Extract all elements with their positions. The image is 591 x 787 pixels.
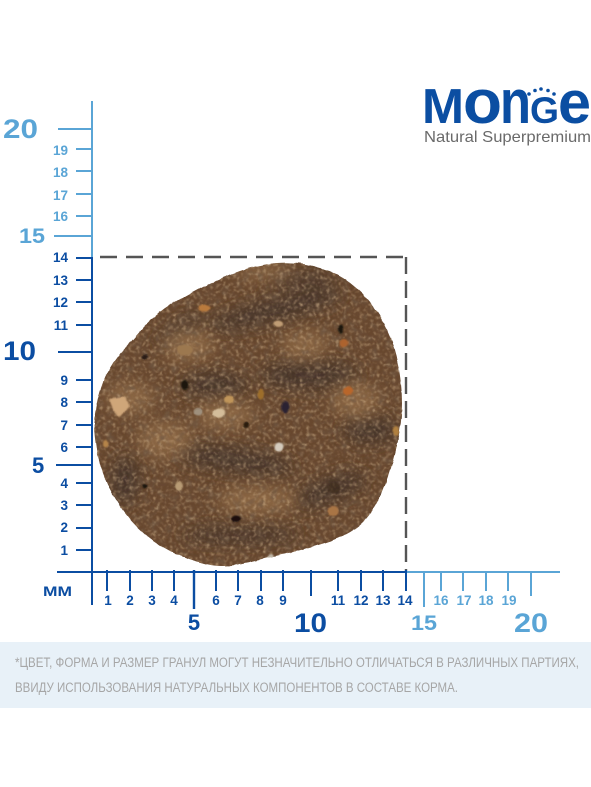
horizontal labels light: 17 — [456, 593, 472, 608]
horizontal labels light: 15 — [411, 612, 437, 635]
vertical labels dark: 7 — [60, 418, 68, 433]
horizontal labels dark: 5 — [188, 610, 200, 635]
horizontal labels light: 16 — [433, 593, 449, 608]
vertical labels light: 15 — [19, 225, 45, 248]
horizontal labels dark: 9 — [279, 593, 287, 608]
horizontal labels dark: 1 — [104, 593, 112, 608]
horizontal labels dark: 12 — [353, 593, 369, 608]
vertical axis light section — [91, 101, 93, 258]
horizontal labels dark: 4 — [170, 593, 178, 608]
kibble dark grain texture — [94, 262, 402, 564]
horizontal axis dark section — [57, 571, 406, 573]
kibble crumbs and holes — [104, 304, 400, 560]
vertical labels dark — [3, 250, 68, 558]
kibble light grain texture — [85, 255, 410, 575]
horizontal ticks dark — [107, 570, 406, 596]
horizontal labels dark: 2 — [126, 593, 134, 608]
vertical labels dark: 14 — [53, 250, 68, 265]
horizontal labels light: 19 — [501, 593, 517, 608]
horizontal tick five — [193, 570, 195, 609]
disclaimer background — [0, 642, 591, 708]
logo crown of stars — [527, 87, 556, 96]
vertical ruler — [3, 101, 93, 605]
disclaimer text line two: ВВИДУ ИСПОЛЬЗОВАНИЯ НАТУРАЛЬНЫХ КОМПОНЕНТОВ В СОСТАВЕ КОРМА. — [15, 680, 458, 695]
horizontal labels dark: 13 — [375, 593, 391, 608]
logo wordmark: o — [463, 68, 502, 137]
vertical axis dark section — [91, 258, 93, 605]
horizontal ruler — [57, 570, 560, 638]
logo: Monge Natural Superpremium — [422, 68, 591, 146]
horizontal labels dark: 3 — [148, 593, 156, 608]
kibble photo — [85, 255, 410, 575]
vertical labels dark: 4 — [60, 476, 68, 491]
horizontal labels dark: 10 — [294, 608, 327, 638]
disclaimer panel — [0, 642, 591, 708]
vertical labels light: 16 — [53, 209, 68, 224]
vertical labels dark: 13 — [53, 273, 68, 288]
horizontal labels dark: 14 — [397, 593, 413, 608]
horizontal ticks light — [424, 571, 531, 607]
vertical labels dark: 12 — [53, 295, 68, 310]
vertical labels dark: 8 — [60, 395, 68, 410]
horizontal axis light section — [406, 571, 560, 573]
logo wordmark: M — [422, 80, 464, 134]
logo wordmark: G — [530, 90, 559, 131]
horizontal labels dark: 8 — [256, 593, 264, 608]
vertical labels dark: 9 — [60, 373, 68, 388]
kibble base colour — [85, 255, 410, 575]
horizontal labels dark: 11 — [331, 593, 346, 608]
unit label: ММ — [43, 583, 72, 599]
vertical ticks dark — [56, 258, 93, 550]
logo wordmark: n — [500, 68, 531, 137]
vertical labels dark: 1 — [60, 543, 68, 558]
vertical labels light: 20 — [3, 114, 38, 144]
horizontal labels light — [411, 593, 548, 638]
vertical labels light: 19 — [53, 143, 68, 158]
horizontal labels dark — [104, 593, 413, 638]
horizontal labels light: 18 — [478, 593, 494, 608]
vertical labels dark: 5 — [32, 453, 44, 478]
vertical labels dark: 6 — [60, 440, 68, 455]
kibble dark bands — [111, 273, 398, 543]
vertical labels light — [3, 114, 68, 248]
logo wordmark: e — [558, 69, 591, 136]
dashed size guide — [100, 257, 406, 572]
vertical labels dark: 11 — [54, 318, 68, 333]
horizontal labels dark: 7 — [234, 593, 242, 608]
kibble lighter patches — [106, 264, 379, 514]
horizontal labels dark: 6 — [212, 593, 220, 608]
vertical labels light: 17 — [53, 188, 68, 203]
vertical labels dark: 2 — [60, 520, 68, 535]
logo tagline: Natural Superpremium — [424, 129, 591, 146]
vertical ticks light — [54, 129, 93, 236]
vertical labels dark: 3 — [60, 498, 68, 513]
horizontal labels light: 20 — [514, 608, 548, 638]
vertical labels dark: 10 — [3, 336, 36, 366]
logo wordmark — [422, 68, 591, 137]
vertical labels light: 18 — [53, 165, 68, 180]
